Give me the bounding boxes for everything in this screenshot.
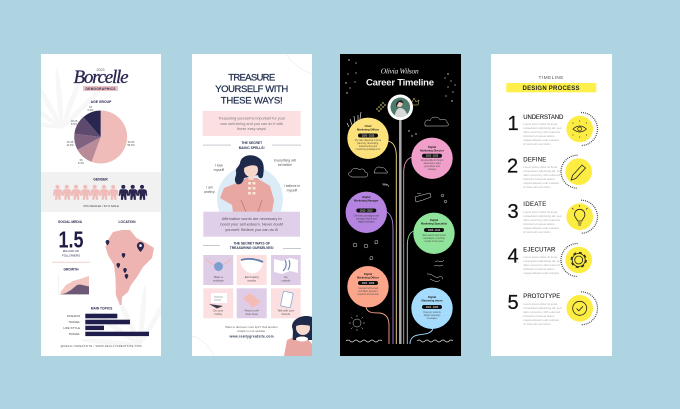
body text: Lorem ipsum dolor sit amet, (523, 255, 558, 259)
pie chart: age group: 36-50 (128, 140, 135, 144)
intro callout: Treasuring yourself is important for your (218, 116, 286, 120)
age group heading: AGE GROUP (91, 100, 112, 104)
milestone: green (413, 213, 455, 254)
milestone: purple: Marketing Manager (354, 198, 379, 202)
intro callout: own well-being and you can do it with (220, 122, 283, 126)
title (215, 72, 288, 106)
panel: treasure yourself (192, 54, 312, 356)
location map: LOCATION (119, 220, 136, 224)
body text (523, 302, 562, 326)
body text: Ut wisi enim ad minim (523, 142, 551, 146)
body text: diam nonummy nibh euismod (523, 218, 560, 222)
social media stat: FOLLOWERS (62, 254, 80, 258)
milestone: blue (411, 288, 453, 329)
main topics bar chart: FASHION (67, 314, 80, 318)
panel: design process (491, 54, 612, 356)
number: 4 (507, 246, 519, 268)
body text: tincidunt ut laoreet dolore (523, 267, 555, 271)
affirmation callout: Affirmation words are necessary to (222, 216, 282, 221)
milestone: purple: Oversaw campaigns and (354, 214, 380, 218)
milestone: pink: generation and (424, 165, 440, 168)
gender band (41, 172, 161, 212)
tile: necklace (203, 255, 233, 285)
body text: Lorem ipsum dolor sit amet, (523, 210, 558, 214)
demographics tag (83, 86, 118, 91)
main topics bar chart: LIFE STYLE (63, 326, 80, 330)
milestone: green: results to the team (425, 240, 444, 243)
body text: magna aliquam erat volutpat. (523, 138, 560, 142)
pie chart: age group: 26-35 (67, 140, 74, 144)
body text: Ut wisi enim ad minim (523, 185, 551, 189)
step 2: define (507, 155, 592, 189)
closing note (225, 325, 278, 338)
body text: diam nonummy nibh euismod (523, 263, 560, 267)
tile: healing snacks (237, 255, 267, 285)
affirmation labels: myself! (287, 188, 297, 192)
milestone: orange (347, 266, 389, 307)
tile: hobby (203, 288, 233, 318)
closing note: www.reallygreatsite.com (228, 334, 274, 338)
illustration: girl portrait (284, 316, 312, 356)
pie chart: age group: 10.0% (66, 143, 74, 147)
tile: talk with friends: friends (282, 312, 291, 316)
secret magic spells heading: MAGIC SPELLS! (239, 146, 265, 150)
milestone: yellow (347, 118, 389, 159)
year label: 2023 (96, 68, 104, 72)
footer: @REALLYGREATSITE / WWW.REALLYGREATSITE.COM (60, 344, 142, 348)
milestone: orange: 2005 - 2008 (362, 283, 375, 285)
milestone: purple: Digital (362, 195, 371, 199)
affirmation labels: myself! (214, 168, 224, 172)
body text: magna aliquam erat volutpat. (523, 318, 560, 322)
milestone: blue: Marketing Intern (422, 298, 443, 302)
heading: UNDERSTAND (523, 115, 564, 121)
title: Career Timeline (366, 78, 434, 88)
tile: talk with friends (271, 288, 301, 318)
body text (523, 165, 562, 189)
milestone: blue: Drew up social & (423, 311, 441, 314)
pie chart: age group: 36 (80, 158, 83, 162)
number: 2 (507, 156, 518, 178)
step 5: prototype (507, 292, 598, 326)
timeline connector lines (366, 118, 433, 344)
secret ways heading: THE SECRET WAYS OF (233, 242, 270, 246)
tile: healing snacks: Eat healing (245, 275, 259, 279)
milestone: blue: digital campaign (424, 314, 441, 317)
body text: tincidunt ut laoreet dolore (523, 134, 555, 138)
icon: pencil (561, 155, 592, 188)
body text: Lorem ipsum dolor sit amet, (523, 165, 558, 169)
intro callout (203, 111, 301, 136)
milestone: pink (411, 138, 453, 179)
milestone: green: Ran search and social (423, 234, 446, 237)
body text: Lorem ipsum dolor sit amet, (523, 122, 558, 126)
milestone: purple: 2010 - 2015 (360, 210, 373, 212)
milestone: yellow: Chief (365, 124, 371, 128)
body text: Lorem ipsum dolor sit amet, (523, 302, 558, 306)
milestone: green: Marketing Specialist (421, 222, 447, 226)
profile photo (388, 94, 413, 120)
social media stat: 1.5 (58, 226, 84, 252)
body text (523, 122, 562, 146)
milestone: yellow: Marketing Officer (357, 128, 379, 132)
body text: consectetur adipiscing elit, sed (523, 306, 562, 310)
tile: go outside (271, 255, 301, 285)
tile: necklace: necklace (213, 278, 224, 282)
icon: gear (561, 244, 592, 276)
tile: talk with friends: Talk with your (277, 308, 294, 312)
body text: consectetur adipiscing elit, sed (523, 259, 562, 263)
tile: go outside: outside (281, 278, 291, 282)
gender band: 70% FEMALE / 30 % MALE (83, 204, 119, 208)
body text: consectetur adipiscing elit, sed (523, 126, 562, 130)
body text: magna aliquam erat volutpat. (523, 271, 560, 275)
milestone: green: campaigns, reporting (423, 237, 445, 240)
milestone: orange: Marketing Officer (357, 276, 379, 280)
body text: magna aliquam erat volutpat. (523, 226, 560, 230)
main topics bar chart: TRAVEL (69, 320, 80, 324)
palm leaf watermarks (62, 125, 142, 345)
body text: Ut wisi enim ad minim (523, 230, 551, 234)
pie chart: age group: 58.0% (127, 143, 135, 147)
demographics tag: DEMOGRAPHICS (86, 87, 116, 91)
brand title: Borcelle (74, 67, 128, 88)
secret ways heading (203, 242, 301, 250)
body text: diam nonummy nibh euismod (523, 130, 560, 134)
icon: light bulb (566, 200, 598, 233)
pie chart: age group (66, 105, 135, 165)
body text: consectetur adipiscing elit, sed (523, 169, 562, 173)
milestone: purple: digital strategies (358, 220, 375, 224)
affirmation callout: yourself. Believe you can do it! (225, 227, 278, 232)
doodles: stars, clouds, waves (345, 59, 456, 342)
affirmation labels: I love (215, 164, 223, 168)
social media stat: SOCIAL MEDIA (58, 220, 83, 224)
people pictogram (53, 185, 147, 200)
closing note: Want to discover more tips? Visit another (225, 325, 278, 329)
milestone: blue: messages (427, 318, 438, 320)
heading: IDEATE (523, 202, 546, 208)
milestone: purple (346, 192, 387, 233)
body text: tincidunt ut laoreet dolore (523, 314, 555, 318)
illustration: woman with affirmations (204, 155, 300, 232)
milestone: yellow: planning, developing, (357, 143, 379, 145)
milestone: pink: strategy (428, 168, 437, 171)
tile: self-help book: help book (246, 312, 258, 316)
milestone: purple: managed brand and (356, 218, 377, 220)
milestone: pink: Digital (428, 145, 436, 149)
affirmation labels: worthy! (204, 190, 215, 194)
step 3: ideate (507, 200, 598, 234)
number: 1 (507, 113, 519, 135)
milestone: pink: Responsible for brand (421, 159, 444, 162)
secret magic spells heading (203, 141, 301, 150)
heading bar: DESIGN PROCESS (522, 86, 580, 92)
milestone: yellow: My main objective is to be (355, 139, 382, 142)
affirmation labels (204, 158, 300, 194)
body text: tincidunt ut laoreet dolore (523, 177, 555, 181)
pie chart: age group: 8.3% (78, 161, 85, 165)
growth area chart (58, 268, 90, 294)
milestone: pink: 2015 - 2020 (426, 156, 439, 158)
social media stat (58, 220, 84, 258)
main topics bar chart (63, 306, 149, 336)
main topics bar chart: MAIN TOPICS (91, 306, 113, 310)
gender band: GENDER (93, 178, 108, 182)
secret ways heading: TREASURING OURSELVES! (230, 246, 274, 250)
map: South America (106, 230, 154, 305)
heading: EJECUTAR (523, 248, 556, 254)
milestone: blue: Digital (428, 295, 436, 299)
pie chart: age group: 8.5% (71, 122, 78, 126)
milestone: orange: and SEO, keyword (358, 290, 378, 293)
milestone: orange: research and content (357, 293, 379, 296)
tile: go outside: Go (284, 275, 288, 279)
milestone: yellow: monitoring strategies for (356, 148, 381, 151)
tile: self-help book: Read a self (245, 308, 259, 312)
title: THESE WAYS! (221, 96, 283, 106)
milestone: yellow: implementing and (359, 145, 378, 148)
affirmation callout: boost your self-esteem. Never doubt (220, 222, 284, 226)
number: 3 (507, 201, 519, 223)
body text: consectetur adipiscing elit, sed (523, 214, 562, 218)
body text (523, 255, 562, 275)
tile: self-help book (237, 288, 267, 318)
step 1: understand (507, 112, 598, 146)
pie chart: age group: 18 (89, 105, 92, 109)
panel: Borcelle demographics (41, 54, 161, 356)
subtitle: TIMELINE (538, 75, 564, 81)
icon: eye (566, 112, 598, 146)
milestone: blue: 2003 - 2005 (426, 307, 439, 309)
milestone: pink: awareness, lead (424, 162, 441, 165)
pie chart: age group: 18-25 (71, 119, 78, 123)
step 4: ejecutar (507, 244, 592, 276)
affirmation callout (203, 212, 300, 237)
heading bar (506, 83, 596, 92)
body text: tincidunt ut laoreet dolore (523, 222, 555, 226)
body text (523, 210, 562, 234)
growth area chart: GROWTH (63, 268, 79, 272)
heading: PROTOTYPE (523, 294, 560, 300)
tile: necklace: Make a (214, 275, 223, 279)
map pins (106, 240, 144, 279)
social media stat: MILLION OF (63, 249, 79, 253)
affirmation labels: I believe in (284, 184, 300, 188)
body text: magna aliquam erat volutpat. (523, 181, 560, 185)
number: 5 (507, 292, 519, 314)
tile: hobby: Do your (213, 308, 223, 312)
main topics bar chart: TRAVEL (69, 332, 80, 336)
pie chart: age group: 6.0% (88, 108, 94, 112)
milestone: green: 2008 - 2010 (428, 230, 441, 232)
panel: career timeline (340, 54, 461, 356)
affirmation labels: be better! (278, 163, 292, 167)
milestone: orange: Digital (364, 272, 372, 276)
affirmation labels: I am (206, 186, 213, 190)
secret magic spells heading: THE SECRET (241, 141, 262, 145)
body text: diam nonummy nibh euismod (523, 173, 560, 177)
affirmation labels: Everything will (274, 158, 296, 162)
milestone: orange: Assisted with email (358, 287, 378, 290)
title: YOURSELF WITH (215, 84, 288, 95)
tile: healing snacks: snacks (247, 278, 257, 282)
title: TREASURE (228, 72, 275, 84)
script name: Olivia Wilson (381, 66, 419, 76)
heading: DEFINE (523, 158, 546, 164)
icon: check (566, 292, 598, 325)
corner arcs (192, 54, 312, 356)
milestone: green: Digital (430, 218, 438, 222)
closing note: insight on our website: (237, 329, 266, 333)
tile: hobby: hobby (214, 312, 223, 316)
milestone: pink: Marketing Director (420, 148, 444, 152)
body text: diam nonummy nibh euismod (523, 310, 560, 314)
milestone: yellow: 2020 - 2025 (362, 136, 375, 138)
body text: Ut wisi enim ad minim (523, 322, 551, 326)
location map (106, 220, 154, 305)
intro callout: these easy ways! (237, 127, 266, 131)
